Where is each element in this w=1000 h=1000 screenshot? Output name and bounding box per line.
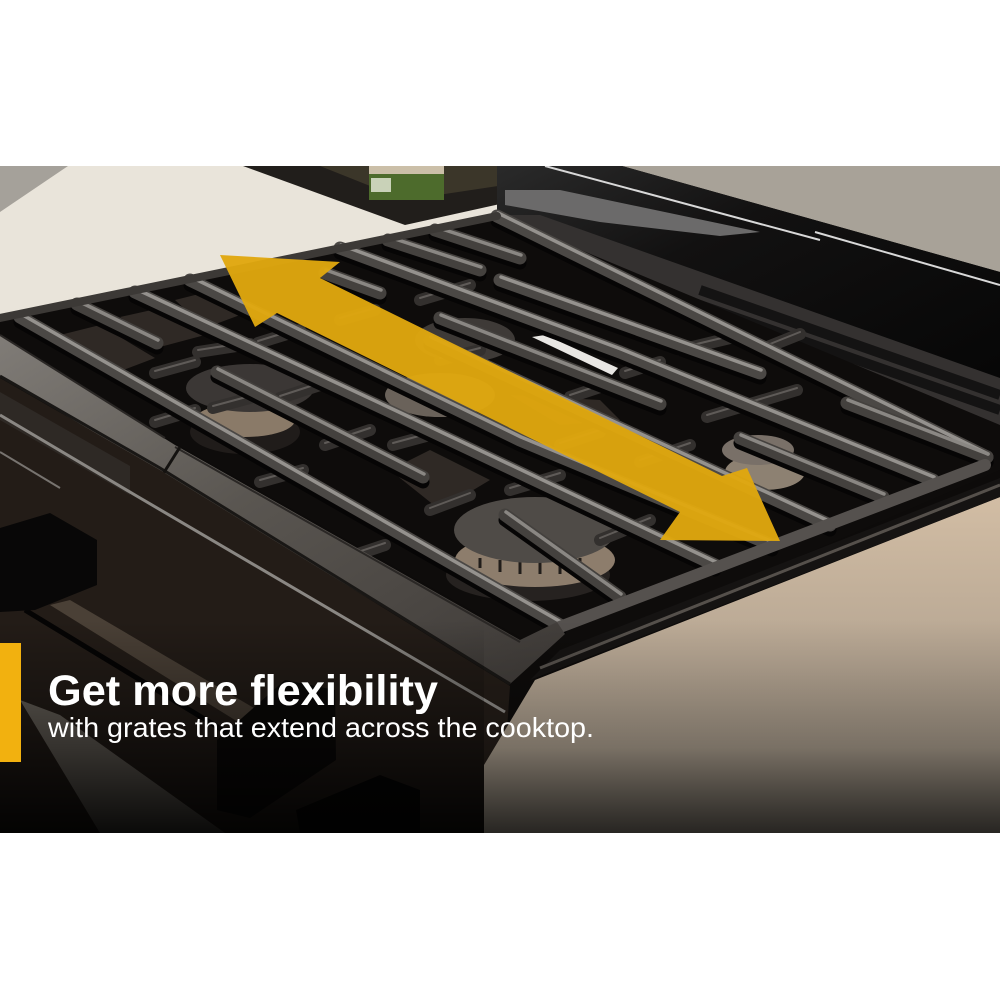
front rail of cooktop xyxy=(0,335,565,684)
glossy reflections in the well xyxy=(60,290,620,510)
grate bars xyxy=(0,213,988,630)
infographic: cooktop photo scene with headline xyxy=(0,166,1000,833)
burner: rear left xyxy=(186,364,314,454)
knob upper left xyxy=(0,513,97,612)
utensil at counter corner xyxy=(0,166,68,212)
grate well xyxy=(581,250,1000,432)
grate front edge xyxy=(560,465,985,627)
countertop right xyxy=(484,478,1000,833)
double-headed arrow xyxy=(220,255,780,541)
dark bottom gradient right xyxy=(484,644,1000,833)
beige rear wall panel xyxy=(622,166,1000,272)
control panel front xyxy=(0,378,510,833)
yellow accent bar xyxy=(0,643,21,762)
glossy black backguard xyxy=(497,166,1000,432)
white oven vent highlight xyxy=(532,335,618,375)
subheading: with grates that extend across the cooktop. xyxy=(47,712,594,743)
grate back edge xyxy=(0,216,497,318)
burner: right small xyxy=(722,435,805,490)
tray with jar xyxy=(243,166,500,225)
burner: rear middle xyxy=(385,318,515,417)
kitchen counter background xyxy=(0,166,500,316)
knob lower right xyxy=(342,775,420,792)
dark bottom gradient left xyxy=(0,620,484,833)
headline: Get more flexibility xyxy=(48,667,438,715)
knob lower middle xyxy=(217,680,336,784)
burner: front large xyxy=(446,497,616,601)
photo base xyxy=(0,166,1000,726)
